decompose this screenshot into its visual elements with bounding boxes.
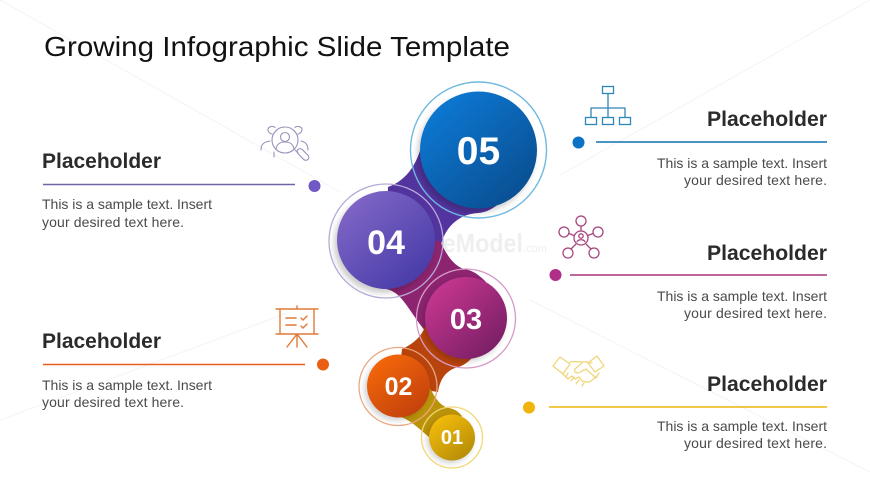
body text 05 xyxy=(657,155,827,188)
connector 01-02 xyxy=(398,386,462,438)
circle 03: 03 xyxy=(450,304,482,336)
heading: placeholder 05: Placeholder xyxy=(707,108,827,131)
heading: placeholder 01: Placeholder xyxy=(707,373,827,396)
connector 02-03 xyxy=(398,318,472,392)
circle 05 xyxy=(410,82,546,218)
heading: placeholder 03: Placeholder xyxy=(707,242,827,265)
body text 03: your desired text here. xyxy=(684,305,827,321)
connector 04-05 xyxy=(386,140,496,245)
chart: growing connected circles xyxy=(329,82,546,468)
title: Growing Infographic Slide Template xyxy=(44,31,510,62)
body text 04: This is a sample text. Insert xyxy=(42,196,212,212)
divider and dot 04 xyxy=(43,180,320,192)
body text 01: your desired text here. xyxy=(684,435,827,451)
body text 01: This is a sample text. Insert xyxy=(657,418,827,434)
panel: step 04 text, left top xyxy=(42,150,320,230)
icon: presentation board xyxy=(276,306,318,347)
body text 02: your desired text here. xyxy=(42,394,184,410)
body text 01 xyxy=(657,418,827,451)
circle 02: 02 xyxy=(385,373,412,401)
divider and dot 05 xyxy=(572,136,827,148)
body text 02: This is a sample text. Insert xyxy=(42,377,212,393)
circle 01: 01 xyxy=(441,427,463,449)
body text 05: your desired text here. xyxy=(684,172,827,188)
heading: placeholder 04: Placeholder xyxy=(42,150,161,173)
watermark: .com xyxy=(523,243,547,255)
icon: handshake xyxy=(553,356,604,386)
watermark: SlideModel xyxy=(400,228,523,258)
circle 04 xyxy=(329,184,443,298)
body text 04: your desired text here. xyxy=(42,214,184,230)
body text 03: This is a sample text. Insert xyxy=(657,288,827,304)
icon: people search xyxy=(261,126,310,162)
panel: step 03 text, right middle xyxy=(550,242,827,321)
circle 02 xyxy=(359,348,437,426)
body text 04 xyxy=(42,196,212,230)
circle 01 xyxy=(422,407,482,468)
icon: network xyxy=(559,216,603,258)
body text 03 xyxy=(657,288,827,321)
panel: step 02 text, left bottom xyxy=(42,330,329,410)
connector 03-04 xyxy=(386,241,486,332)
panel: step 01 text, right bottom xyxy=(523,373,827,451)
panel: step 05 text, right top xyxy=(572,108,827,188)
circle 03 xyxy=(416,269,516,368)
heading: placeholder 02: Placeholder xyxy=(42,330,161,353)
body text 05: This is a sample text. Insert xyxy=(657,155,827,171)
icon: hierarchy xyxy=(586,86,630,124)
divider and dot 01 xyxy=(523,402,827,414)
divider and dot 02 xyxy=(43,358,329,370)
body text 02 xyxy=(42,377,212,410)
circle 04: 04 xyxy=(367,224,405,262)
circle 05: 05 xyxy=(457,130,500,173)
divider and dot 03 xyxy=(550,269,827,281)
